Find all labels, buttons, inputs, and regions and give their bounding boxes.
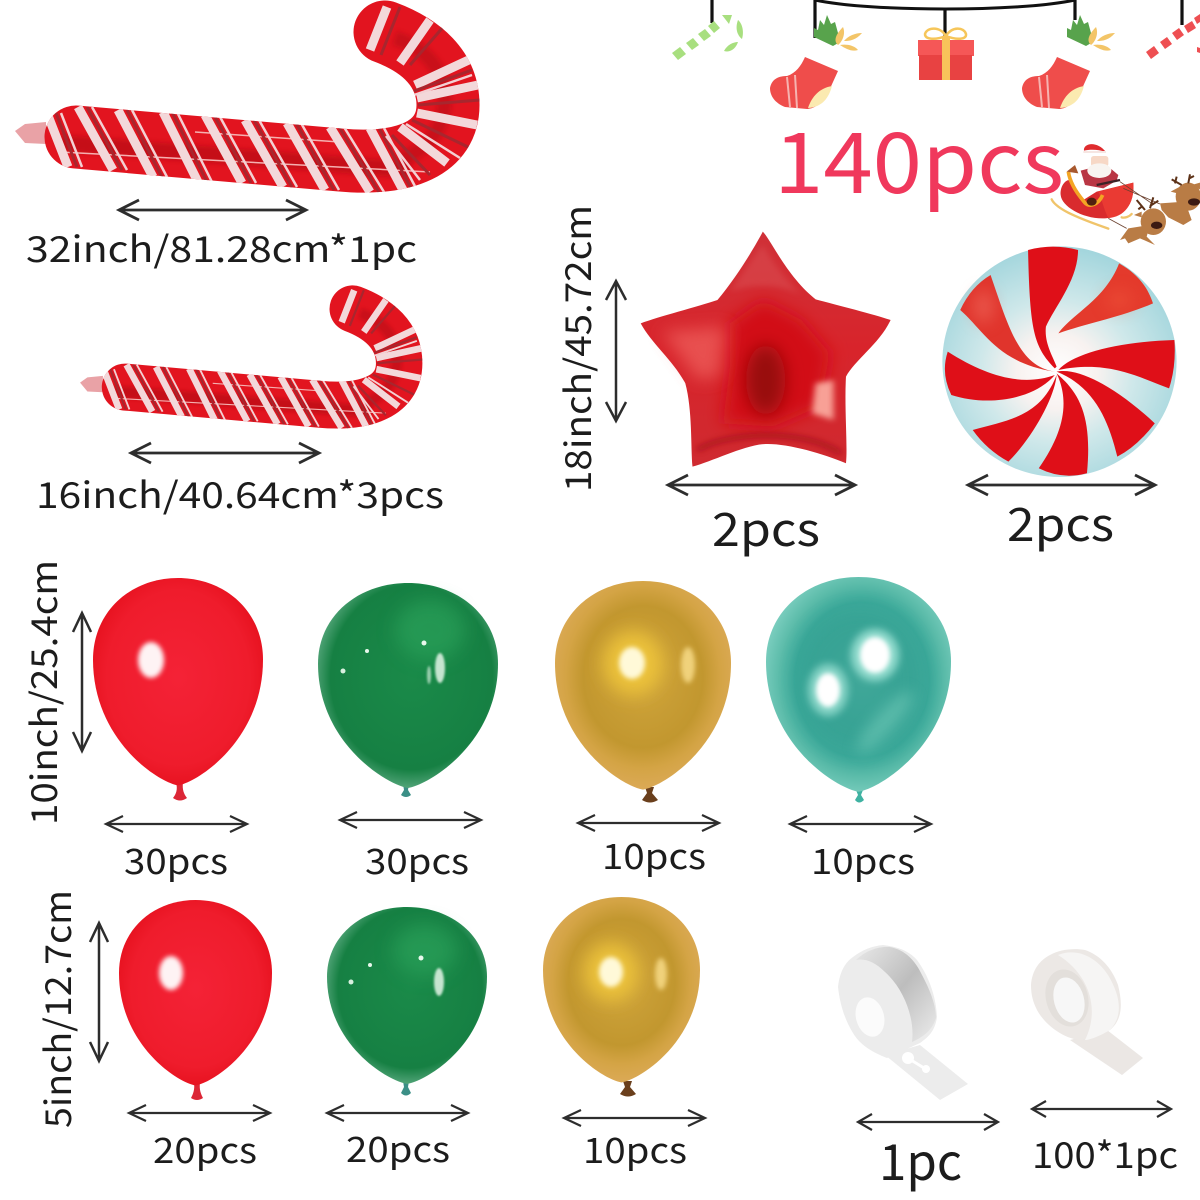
arrow: glue dots width [1032,1101,1171,1117]
5 inch green balloon [327,907,487,1096]
arrow: 5 inch green [327,1105,468,1121]
runner [1052,199,1132,229]
label: large cane size: 32inch/81.28cm*1pc [26,221,417,273]
icon: left stocking [770,57,838,109]
label: star count: 2pcs [712,494,820,560]
label: glue dots count: 100*1pc [1032,1127,1178,1179]
glue dots roll [1031,949,1143,1075]
hanging Christmas decorations [672,0,1200,109]
label: tape count: 1pc [879,1123,962,1195]
label: small cane size: 16inch/40.64cm*3pcs [36,467,444,519]
arrow: 5 inch height [90,923,108,1061]
5 inch gold balloon [543,897,700,1096]
icon: right stocking [1022,57,1090,109]
title: 140pcs: 140pcs [774,97,1064,218]
5 inch red balloon [119,900,272,1100]
Santa [1081,144,1120,188]
arrow: 5 inch gold [564,1110,705,1126]
10 inch green balloon [318,583,498,797]
arrow: foil balloon height [606,281,626,421]
arrow: small cane width [131,443,319,463]
icon: green candy cane [672,15,743,60]
arrow: 5 inch red [129,1105,270,1121]
label: 10 inch gold count: 10pcs [602,829,706,880]
icon: left leaf sprig [814,15,862,51]
arrow: 10 inch red [106,816,247,832]
icon: Santa sleigh with reindeer [1052,144,1200,245]
arrow: star width [668,475,855,495]
arrow: large cane width [119,200,306,220]
10 inch gold balloon [555,581,731,802]
icon: red candy cane [1146,14,1200,59]
label: 10 inch size: 10inch/25.4cm [16,560,68,825]
reindeer [1108,174,1200,245]
small candy cane balloon [80,290,423,428]
label: 10 inch red count: 30pcs [124,834,228,885]
label: 10 inch teal count: 10pcs [811,834,915,885]
label: peppermint count: 2pcs [1007,489,1114,555]
label: foil balloon size: 18inch/45.72cm [550,205,602,492]
icon: right leaf sprig [1067,15,1115,51]
10 inch teal balloon [766,577,951,802]
balloon tape roll [838,945,968,1100]
sleigh [1061,165,1133,218]
star foil balloon [641,232,891,467]
10 inch red balloon [93,578,263,800]
peppermint foil balloon [942,246,1177,477]
label: 5 inch gold count: 10pcs [583,1123,687,1174]
icon: gift box [918,29,974,80]
arrow: 10 inch green [340,812,481,828]
arrow: peppermint width [968,475,1155,495]
label: 5 inch red count: 20pcs [153,1123,257,1174]
arrow: 10 inch height [73,613,91,751]
arrow: 10 inch teal [790,816,931,832]
arrow: tape width [858,1114,998,1130]
arrow: 10 inch gold [578,815,719,831]
label: 10 inch green count: 30pcs [365,834,469,885]
label: 5 inch green count: 20pcs [346,1122,450,1173]
label: 5 inch size: 5inch/12.7cm [30,890,82,1128]
large candy cane balloon [15,7,480,192]
